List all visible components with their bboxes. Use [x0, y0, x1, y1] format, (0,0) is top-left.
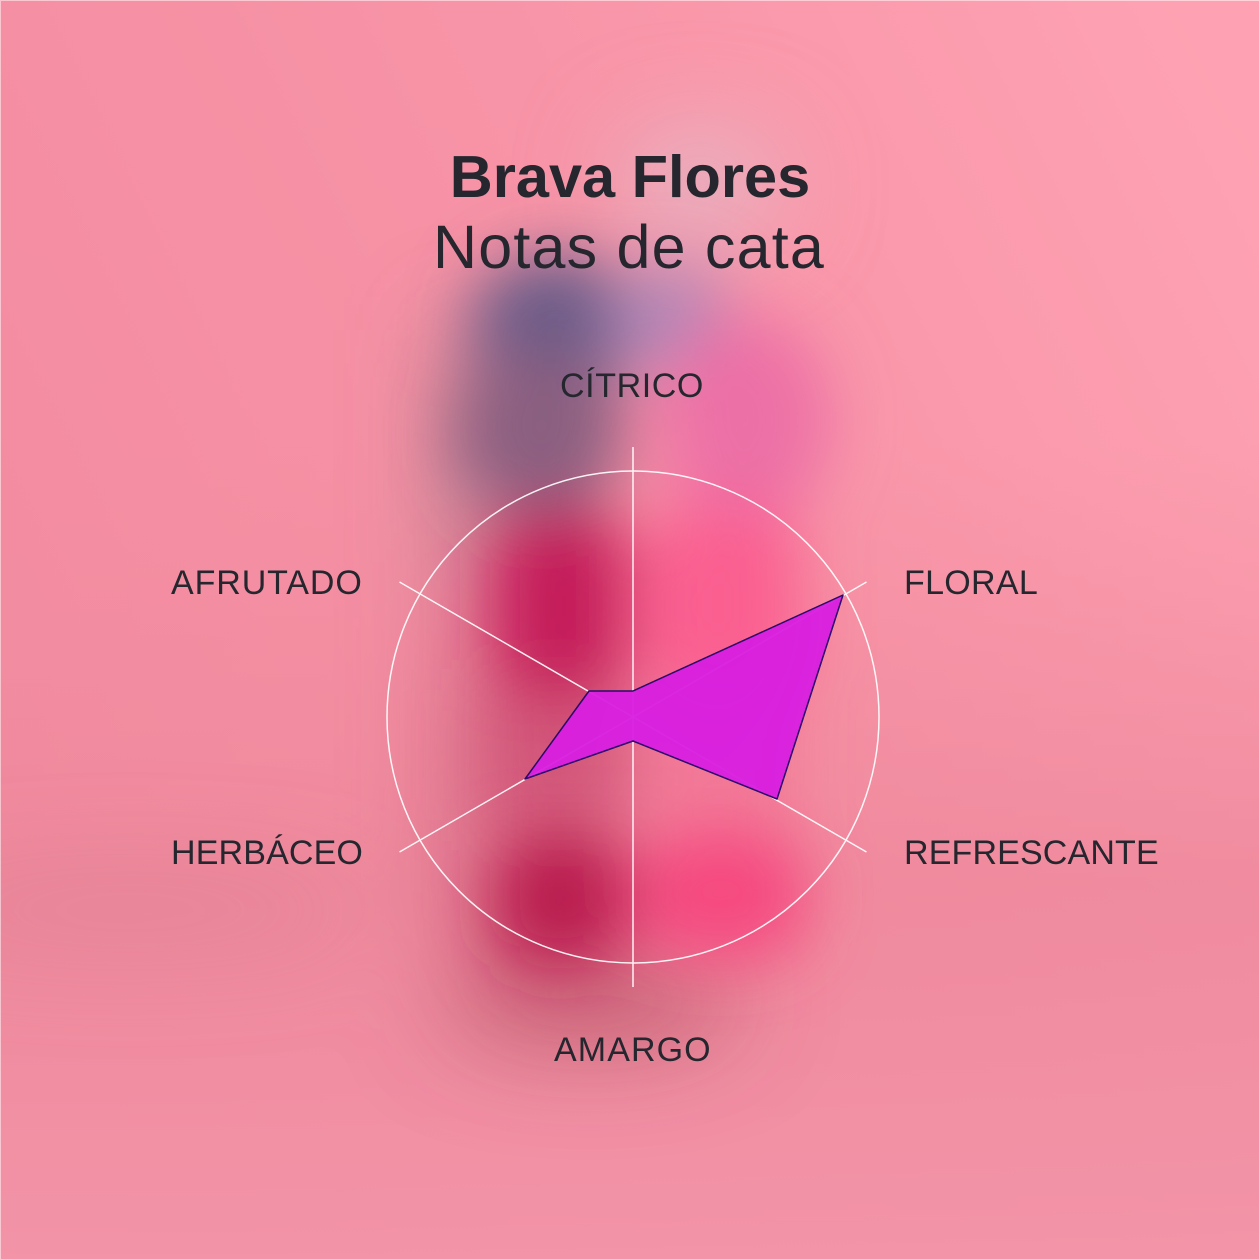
data polygon [525, 595, 843, 799]
title: Brava Flores [450, 143, 810, 210]
label: refrescante: REFRESCANTE [904, 834, 1159, 872]
chart grid [387, 447, 879, 987]
label: afrutado: AFRUTADO [171, 564, 363, 602]
label: citrico: CÍTRICO [560, 367, 704, 405]
label: amargo: AMARGO [554, 1031, 712, 1069]
subtitle: Notas de cata [433, 213, 825, 281]
label: floral: FLORAL [904, 564, 1038, 602]
label: herbaceo: HERBÁCEO [171, 834, 363, 872]
